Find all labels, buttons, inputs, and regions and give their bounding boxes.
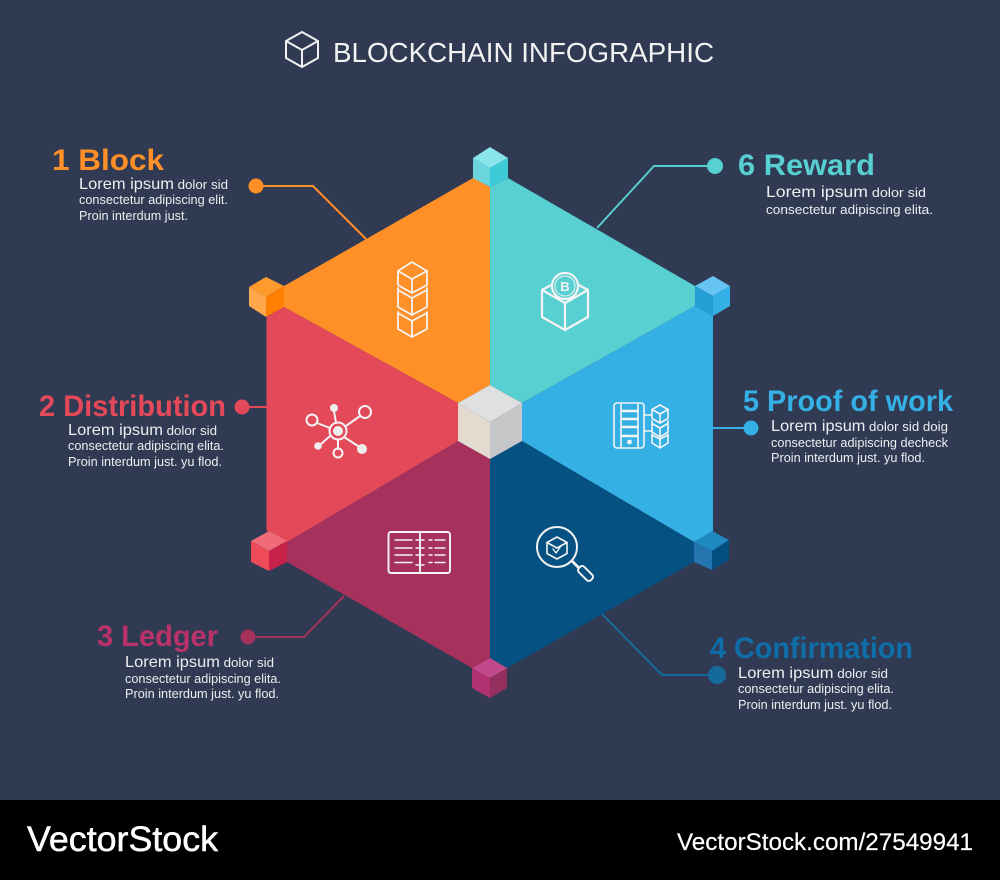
leader line [240, 596, 344, 644]
cube: top [473, 147, 508, 187]
description: Lorem ipsum dolor sid doig [771, 418, 948, 435]
cube: lower right [694, 531, 729, 570]
icon: title cube [286, 32, 318, 67]
panel: proof of work [522, 306, 713, 542]
description: Proin interdum just. [79, 208, 188, 223]
hexagon diagram [249, 147, 730, 698]
description: Lorem ipsum dolor sid [738, 665, 888, 682]
icon: bitcoin box: B [560, 279, 570, 294]
leader line [602, 614, 726, 684]
panel: ledger [287, 441, 490, 668]
description: Proin interdum just. yu flod. [68, 454, 222, 469]
description: Lorem ipsum dolor sid [125, 654, 274, 671]
description: Proin interdum just. yu flod. [125, 686, 279, 701]
leader line [713, 420, 758, 436]
leader line [234, 400, 267, 414]
callout 1: Block [52, 144, 366, 239]
cube: bottom [472, 658, 507, 698]
description: consectetur adipiscing decheck [771, 435, 948, 450]
description: consectetur adipiscing elit. [79, 192, 228, 207]
heading: 4 Confirmation [710, 632, 913, 665]
icon: magnifier with checked cube [537, 527, 594, 582]
description: consectetur adipiscing elita. [738, 681, 894, 696]
icon: server with blocks [614, 403, 668, 448]
icon: network [306, 404, 371, 458]
title [286, 32, 714, 68]
callout 4: Confirmation [602, 614, 913, 712]
description: consectetur adipiscing elita. [766, 202, 933, 217]
description [68, 422, 224, 469]
footer url: VectorStock.com/27549941 [677, 829, 973, 856]
leader line [597, 158, 723, 228]
icon: stacked blocks [398, 262, 427, 337]
callout 2: Distribution [39, 390, 267, 469]
description: consectetur adipiscing elita. [125, 671, 281, 686]
heading: 1 Block [52, 144, 164, 177]
description [766, 184, 933, 217]
description: consectetur adipiscing elita. [68, 438, 224, 453]
description: Lorem ipsum dolor sid [766, 184, 926, 201]
footer logo: VectorStock [27, 820, 219, 859]
description [79, 176, 228, 223]
footer bar [0, 800, 1000, 880]
heading: 2 Distribution [39, 390, 226, 423]
center cube [458, 385, 522, 459]
description: Lorem ipsum dolor sid [68, 422, 217, 439]
cube: upper left [249, 277, 284, 317]
callout 3: Ledger [97, 596, 344, 701]
panel: reward [490, 178, 695, 403]
heading: 3 Ledger [97, 620, 218, 653]
title text: BLOCKCHAIN INFOGRAPHIC [333, 37, 714, 68]
panel: distribution [266, 307, 458, 542]
description [125, 654, 281, 701]
panel: confirmation [490, 441, 694, 668]
callout 5: Proof of work [713, 385, 953, 465]
cube: upper right [695, 276, 730, 316]
description: Lorem ipsum dolor sid [79, 176, 228, 193]
icon: ledger book [388, 532, 450, 573]
leader line [248, 178, 366, 239]
description [738, 665, 894, 712]
description: Proin interdum just. yu flod. [738, 697, 892, 712]
description [771, 418, 948, 465]
heading: 5 Proof of work [743, 385, 953, 418]
panel: block [284, 178, 490, 403]
callout 6: Reward [597, 149, 933, 228]
heading: 6 Reward [738, 149, 875, 182]
cube: lower left [251, 531, 287, 571]
description: Proin interdum just. yu flod. [771, 450, 925, 465]
icon: bitcoin box [542, 273, 588, 330]
